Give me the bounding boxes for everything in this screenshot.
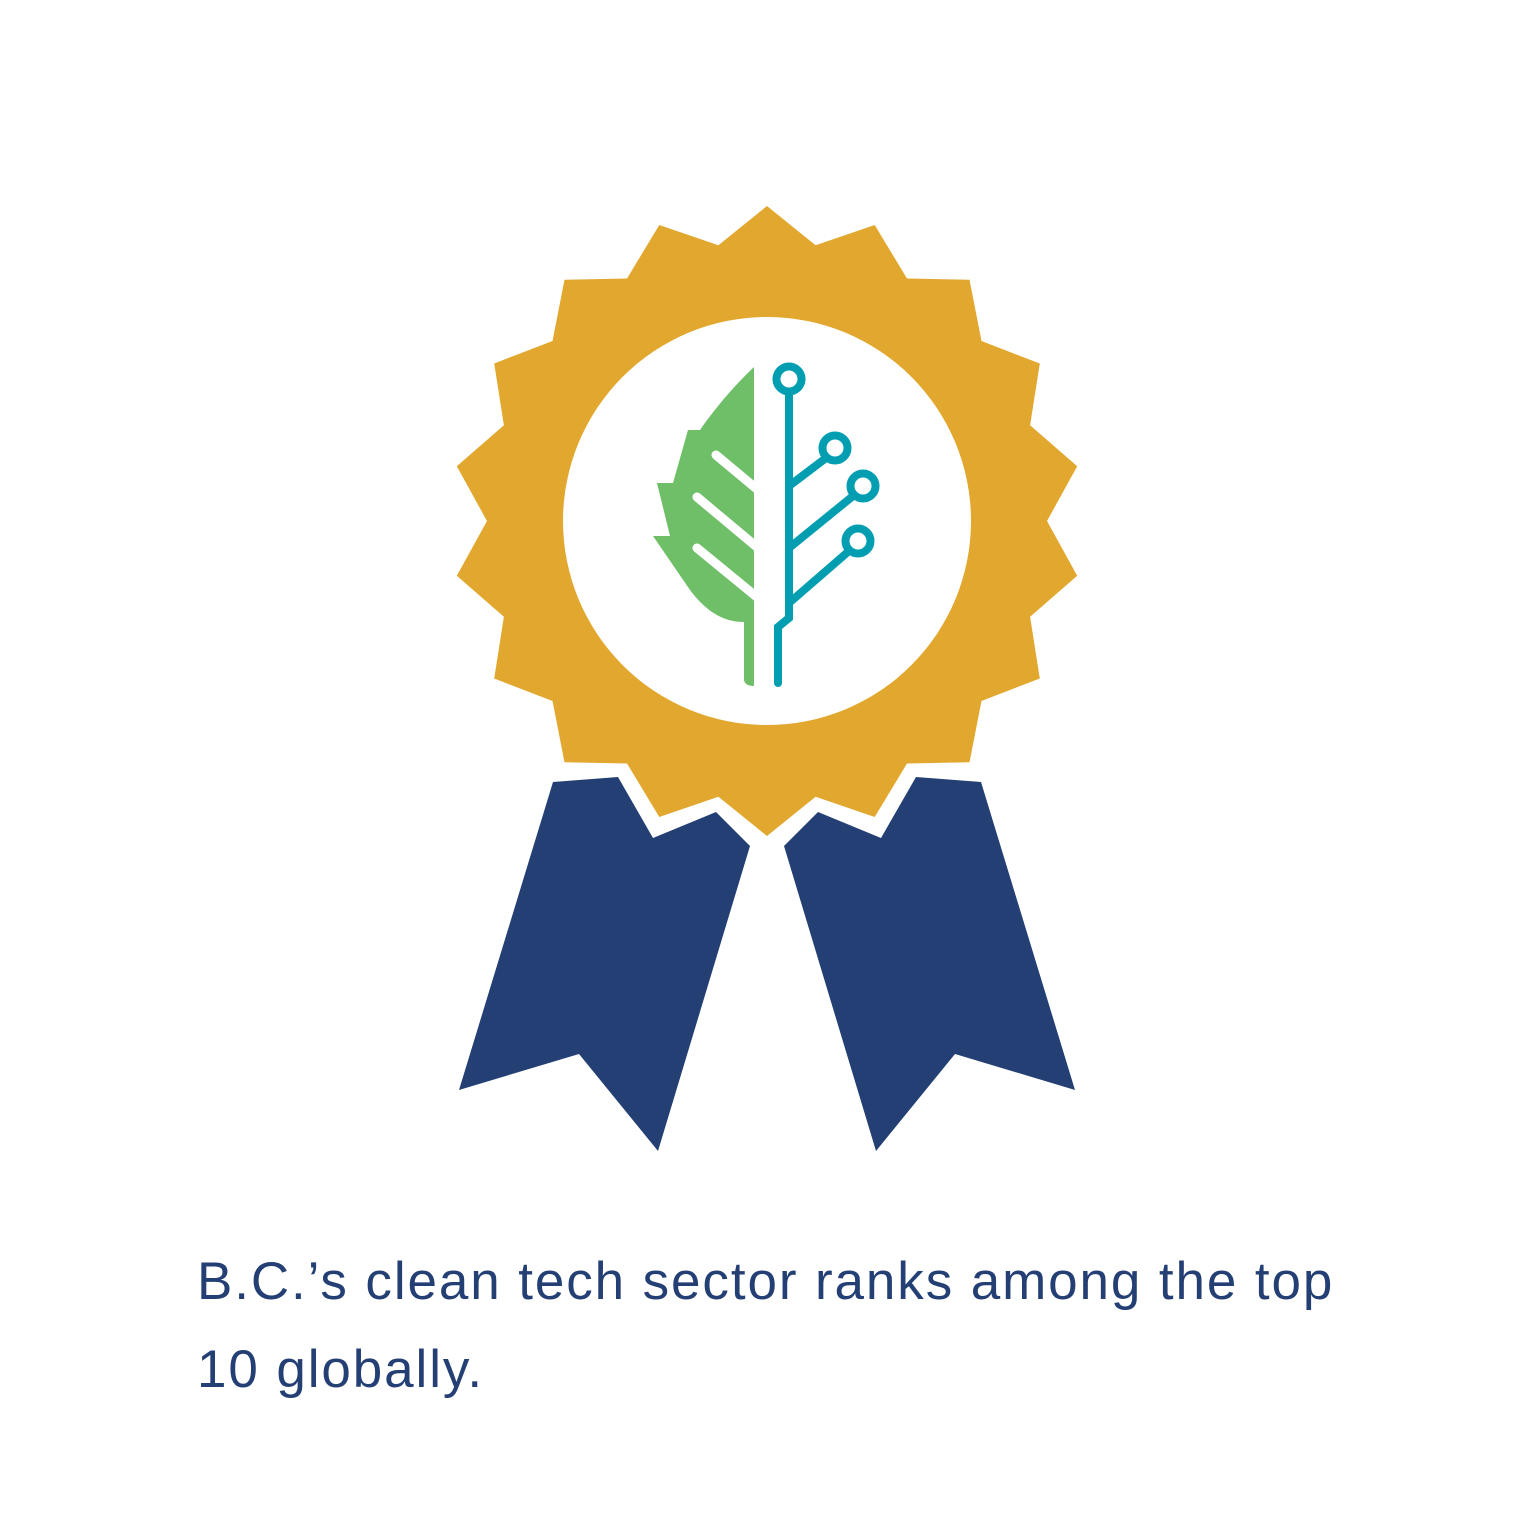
star rosette — [457, 206, 1077, 836]
ribbon: right — [784, 777, 1075, 1151]
caption text — [197, 1252, 1334, 1399]
white inner circle — [563, 317, 971, 725]
icon: leaf — [653, 367, 758, 686]
caption text: B.C.’s clean tech sector ranks among the top — [197, 1252, 1334, 1311]
icon: circuit branch — [776, 366, 876, 683]
ribbon: left — [459, 777, 750, 1151]
caption text: 10 globally. — [197, 1340, 484, 1399]
